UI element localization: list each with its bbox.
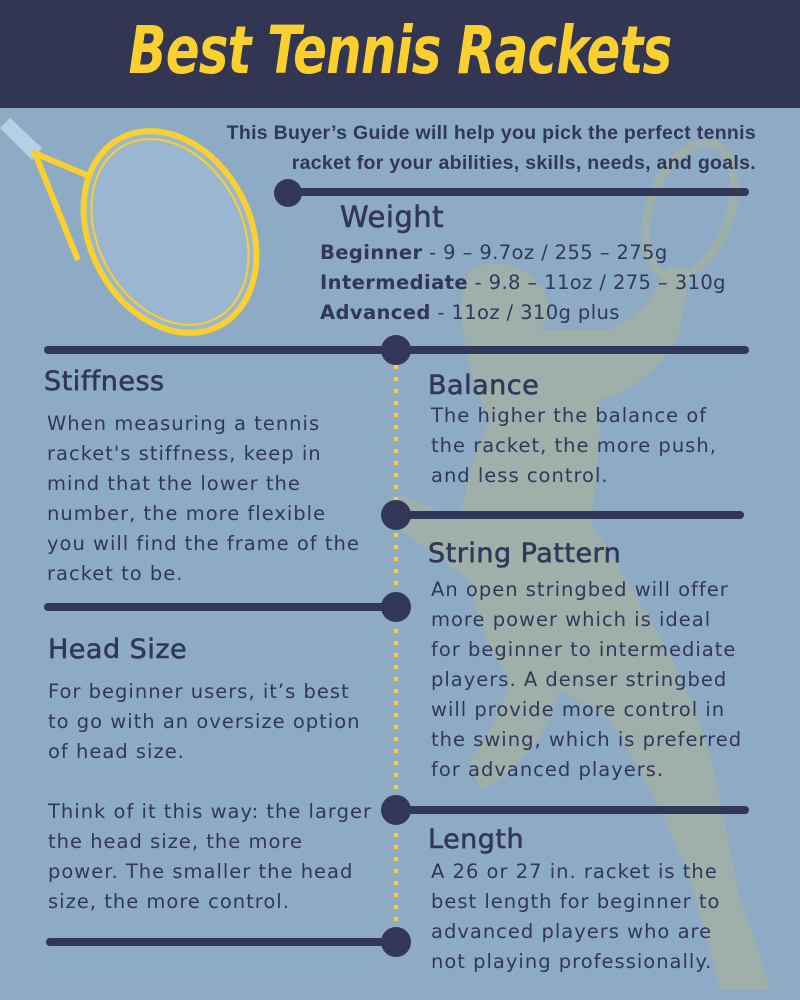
intro text (226, 122, 756, 174)
stiffness section: number, the more flexible (47, 502, 326, 525)
string pattern section: for beginner to intermediate (431, 638, 736, 661)
title: Best Tennis Rackets (129, 12, 671, 89)
string pattern section: String Pattern (428, 538, 621, 569)
head size section: of head size. (48, 740, 185, 763)
length section: best length for beginner to (431, 890, 720, 913)
balance section: the racket, the more push, (431, 434, 717, 457)
header (0, 0, 800, 108)
string pattern section: players. A denser stringbed (431, 668, 727, 691)
string pattern section (428, 538, 742, 781)
length section: advanced players who are (431, 920, 712, 943)
length section: not playing professionally. (431, 950, 712, 973)
length section (428, 824, 720, 973)
head size section: Think of it this way: the larger (48, 800, 372, 823)
stiffness section (44, 366, 360, 585)
string pattern section: for advanced players. (431, 758, 664, 781)
head size section (48, 634, 372, 913)
intro text: racket for your abilities, skills, needs, and goals. (292, 152, 756, 174)
balance section: The higher the balance of (431, 404, 707, 427)
head size section: Head Size (48, 634, 187, 665)
weight section: Beginner - 9 – 9.7oz / 255 – 275g (320, 241, 668, 264)
balance section: Balance (428, 370, 539, 401)
icon: racket (0, 118, 260, 336)
head size section: For beginner users, it’s best (48, 680, 350, 703)
weight section: Advanced - 11oz / 310g plus (320, 301, 620, 324)
balance section: and less control. (431, 464, 609, 487)
intro text: This Buyer’s Guide will help you pick the perfect tennis (227, 122, 756, 144)
weight section: Weight (340, 200, 444, 234)
string pattern section: more power which is ideal (431, 608, 711, 631)
length section: Length (428, 824, 524, 855)
head size section: the head size, the more (48, 830, 303, 853)
stiffness section: When measuring a tennis (47, 412, 320, 435)
head size section: to go with an oversize option (48, 710, 361, 733)
head size section: size, the more control. (48, 890, 290, 913)
stiffness section: racket's stiffness, keep in (47, 442, 322, 465)
length section: A 26 or 27 in. racket is the (431, 860, 718, 883)
stiffness section: you will find the frame of the (47, 532, 360, 555)
stiffness section: mind that the lower the (47, 472, 301, 495)
string pattern section: the swing, which is preferred (431, 728, 742, 751)
string pattern section: An open stringbed will offer (431, 578, 729, 601)
weight section: Intermediate - 9.8 – 11oz / 275 – 310g (320, 271, 726, 294)
weight section (320, 200, 726, 324)
stiffness section: Stiffness (44, 366, 165, 397)
string pattern section: will provide more control in (431, 698, 725, 721)
head size section: power. The smaller the head (48, 860, 353, 883)
balance section (428, 370, 717, 487)
stiffness section: racket to be. (47, 562, 183, 585)
